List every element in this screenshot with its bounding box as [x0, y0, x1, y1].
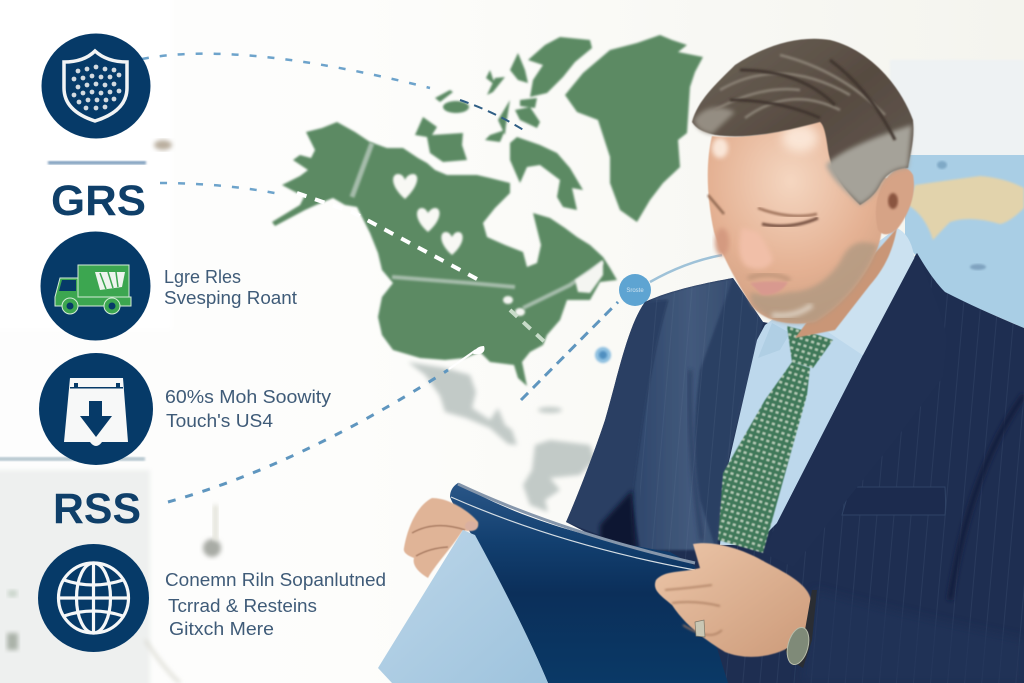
light blue fabric	[378, 530, 548, 683]
folded navy fabric	[450, 483, 728, 683]
mainland Canada, Alaska and USA	[272, 122, 617, 386]
divider bar above GRS	[48, 161, 146, 164]
text block: globe caption: Gitxch Mere	[169, 619, 274, 639]
text block: globe caption: Conemn Riln Sopanlutned	[165, 570, 386, 590]
border strips	[352, 143, 603, 308]
map: North America	[272, 35, 703, 512]
tie	[718, 326, 833, 553]
text block: bag caption: Touch's US4	[166, 411, 273, 431]
heading: GRS: GRS	[51, 177, 146, 225]
dashed route lines	[142, 54, 722, 502]
white lakes	[503, 260, 603, 316]
small blue node	[595, 347, 611, 363]
text block: truck caption	[164, 267, 297, 308]
shirt and collar	[720, 228, 915, 545]
heading: RSS: RSS	[53, 485, 141, 533]
suit jacket	[560, 250, 1024, 683]
icon: truck	[40, 232, 150, 340]
ear	[876, 168, 914, 234]
text block: truck caption: Svesping Roant	[164, 288, 297, 308]
left hand	[404, 498, 478, 578]
text block: bag caption	[165, 387, 331, 431]
Central and South America in grey	[408, 362, 595, 512]
icon: bag with down arrow	[39, 353, 153, 465]
icon: globe	[38, 544, 149, 652]
neck and face	[708, 120, 897, 338]
person in navy suit	[560, 39, 1024, 683]
hair	[692, 39, 913, 205]
map pin	[473, 346, 484, 354]
lapel right	[763, 253, 947, 567]
text block: bag caption: 60%s Moh Soowity	[165, 387, 331, 407]
Arctic islands	[415, 37, 592, 210]
Greenland	[565, 35, 703, 222]
text block: globe caption: Tcrrad & Resteins	[168, 596, 317, 616]
hearts on map	[393, 174, 463, 255]
icon: shield	[42, 34, 150, 138]
text block: truck caption: Lgre Rles	[164, 267, 241, 287]
blue node on map	[619, 274, 651, 306]
text block: globe caption	[165, 570, 386, 639]
wall map panel behind person	[890, 60, 1024, 328]
right hand with ring and watch	[655, 543, 817, 668]
blue node on map: Sroste	[626, 288, 644, 294]
